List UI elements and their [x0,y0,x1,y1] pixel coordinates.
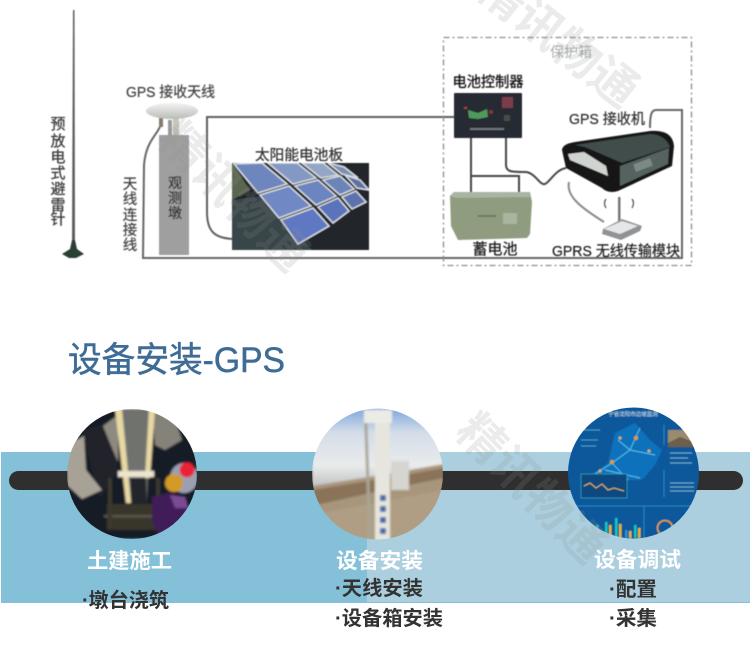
step 2 text: equipment installation: 设备安装 [336,550,423,573]
step 3 text: equipment commissioning: 设备调试 [594,549,681,572]
step 1 text: civil works [82,550,172,612]
label: GPS receiver: GPS 接收机 [569,111,645,128]
label: GPS antenna: GPS 接收天线 [126,84,215,101]
icon: lightning rod [62,10,84,258]
image: monitoring dashboard screenshot [567,407,700,540]
label: antenna cable: 天 [123,177,137,193]
label: battery controller: 电池控制器 [452,74,524,91]
icon: GPRS wireless module [602,197,642,240]
icon: battery controller [454,93,522,138]
label: GPRS wireless module: GPRS 无线传输模块 [552,243,680,260]
label: lightning rod: 放 [50,133,66,150]
panel: protective enclosure [444,38,692,266]
label: lightning rod: 避 [50,181,66,198]
label: antenna cable [123,177,138,254]
label: lightning rod: 式 [50,165,66,182]
label: solar panel: 太阳能电池板 [255,146,344,164]
icon: storage battery [450,192,532,240]
step 2 text: equipment installation: ·设备箱安装 [335,607,443,630]
image: monitoring dashboard screenshot: 宁省沈阳市边坡监测 [608,410,658,418]
image: solar panels [232,163,369,250]
label: storage battery: 蓄电池 [472,241,518,258]
label: protective enclosure: 保护箱 [550,44,592,60]
image: civil works photo [67,409,198,539]
label: antenna cable: 连 [123,207,138,224]
label: antenna cable: 接 [123,222,137,239]
icon: GPS receiver [562,131,674,192]
label: lightning rod: 雷 [50,197,66,214]
step 1 text: civil works: 土建施工 [87,550,172,573]
label: antenna cable: 线 [123,191,137,208]
label: observation pier: 墩 [168,205,182,221]
label: lightning rod: 预 [50,116,66,133]
step 3 text: equipment commissioning: ·配置 [609,579,657,601]
timeline bar [9,471,743,490]
step 3 text: equipment commissioning [594,549,681,630]
step 2 text: equipment installation: ·天线安装 [335,577,423,600]
panel: blue band [1,452,750,603]
heading: 设备安装-GPS [68,341,285,380]
image: equipment installation photo [312,408,444,540]
watermark [148,0,649,574]
label: lightning rod: 电 [50,149,66,166]
label: lightning rod: 针 [50,211,66,228]
label: observation pier: 测 [168,190,182,206]
wiring: antenna and power lines [143,110,682,258]
step 3 text: equipment commissioning: ·采集 [609,607,657,630]
watermark: 精讯物通 [446,403,617,574]
label: antenna cable: 线 [123,237,137,254]
label: observation pier: 观 [168,175,182,191]
step 2 text: equipment installation [335,550,443,630]
watermark: 精讯物通 [148,111,319,282]
system diagram [50,10,692,266]
label: observation pier [168,175,182,221]
label: lightning rod [50,116,66,228]
step 1 text: civil works: ·墩台浇筑 [82,588,169,612]
icon: GPS antenna dome and observation pier [146,103,198,255]
